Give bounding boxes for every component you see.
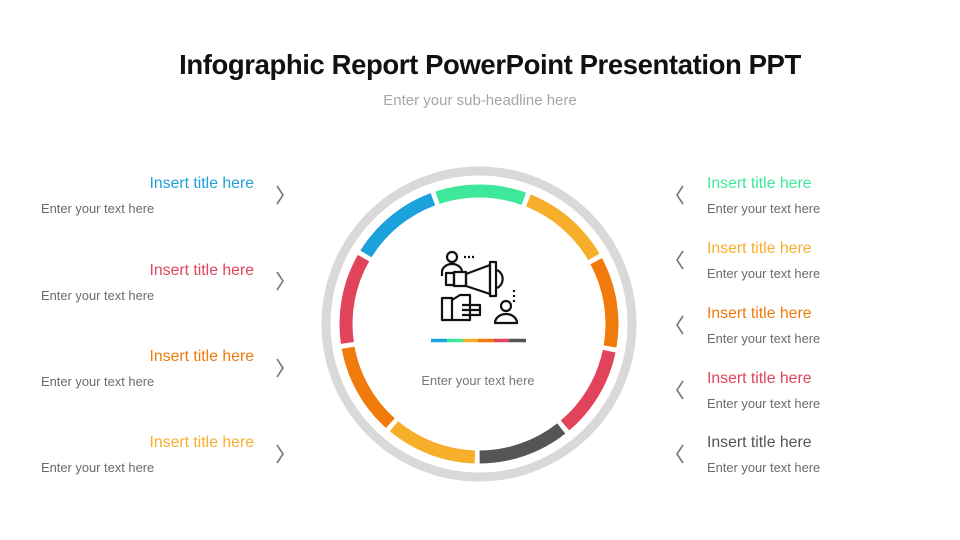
left item 3: Insert title here [150,348,254,365]
right item 5: Insert title here [707,434,812,451]
right item 4 [707,370,820,411]
right item 1: Insert title here [707,175,812,192]
right item 5: Enter your text here [707,460,820,475]
right item 2: Insert title here [707,240,812,257]
left item 2 [41,262,254,303]
left item 3 [41,348,254,389]
center text: Enter your text here [421,373,535,388]
left item 4: Insert title here [150,434,254,451]
right item 4: Enter your text here [707,396,820,411]
right item 3: Insert title here [707,305,812,322]
left item 1 [41,175,254,216]
right item 5 [707,434,820,475]
left item 2: Insert title here [150,262,254,279]
right item 3 [707,305,820,346]
right item 3: Enter your text here [707,331,820,346]
right item 1 [707,175,820,216]
left item 3: Enter your text here [41,374,154,389]
left item 1: Insert title here [150,175,254,192]
right item 4: Insert title here [707,370,812,387]
icon: megaphone [442,252,517,323]
ring [291,136,667,512]
left item 2: Enter your text here [41,288,154,303]
title: Infographic Report PowerPoint Presentation PPT [179,49,801,80]
right item 2 [707,240,820,281]
subtitle: Enter your sub-headline here [383,92,577,109]
left item 1: Enter your text here [41,201,154,216]
color bar [431,339,526,342]
right item 2: Enter your text here [707,266,820,281]
left item 4 [41,434,254,475]
right item 1: Enter your text here [707,201,820,216]
left item 4: Enter your text here [41,460,154,475]
chevrons left [277,186,283,463]
chevrons right [677,186,683,463]
